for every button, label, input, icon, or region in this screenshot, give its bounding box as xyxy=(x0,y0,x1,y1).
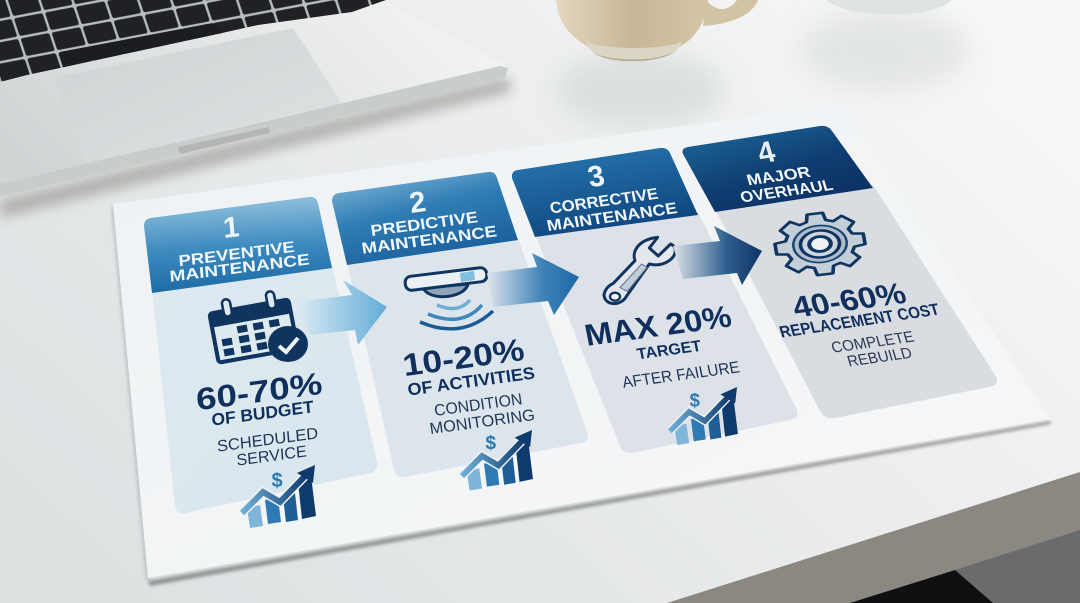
panel 3 stat label: TARGET xyxy=(635,338,703,363)
panel 4 title: OVERHAUL xyxy=(738,177,835,206)
panel 3 body xyxy=(535,212,798,453)
panel 4 stat label: REPLACEMENT COST xyxy=(777,301,942,342)
icon: growth chart xyxy=(670,387,738,445)
panel 2 title: PREDICTIVE xyxy=(370,209,479,240)
icon: wrench xyxy=(604,237,675,304)
icon: growth chart xyxy=(242,465,316,528)
paper shadow xyxy=(111,206,1051,586)
panel 3 step number: 3 xyxy=(585,159,607,194)
panel 2 description: MONITORING xyxy=(428,406,536,438)
panel 3 stat: MAX 20% xyxy=(582,300,734,353)
infographic sheet xyxy=(113,104,1050,578)
panel 1 body xyxy=(152,265,377,513)
desk front edge and floor xyxy=(667,472,1080,603)
panel 1 stat: 60-70% xyxy=(195,366,324,417)
panel 1 title: MAINTENANCE xyxy=(169,251,310,286)
icon: sensor with signal waves xyxy=(404,267,493,329)
panel 1 title: PREVENTIVE xyxy=(178,239,295,270)
panel 4 description: REBUILD xyxy=(845,345,914,370)
panel 4: major overhaul xyxy=(683,126,997,418)
panel 3: corrective maintenance xyxy=(512,148,798,453)
panel 2 description: CONDITION xyxy=(433,390,524,420)
panel 2 stat label: OF ACTIVITIES xyxy=(406,363,536,400)
panel 2 body xyxy=(347,238,588,477)
panel 2: predictive maintenance xyxy=(332,172,588,490)
arrow: step 3 to 4 xyxy=(673,226,762,285)
panel 1 description: SCHEDULED xyxy=(216,424,319,456)
icon: calendar with check xyxy=(205,288,308,365)
panel 4 step number: 4 xyxy=(753,135,780,170)
panel 4 title xyxy=(738,164,835,206)
panel 1 title xyxy=(169,239,310,286)
panel 1 description: SERVICE xyxy=(236,442,308,470)
panel 1 description xyxy=(216,424,319,470)
panel 2 step number: 2 xyxy=(407,185,428,220)
icon: growth chart: $ xyxy=(690,389,700,410)
panel 2 header xyxy=(332,172,518,265)
panel 1 stat label: OF BUDGET xyxy=(211,397,315,430)
panel 4 body xyxy=(715,185,997,418)
panel 1 header xyxy=(144,197,332,293)
icon: gear xyxy=(771,208,869,280)
icon: growth chart: $ xyxy=(271,470,283,492)
arrow: step 2 to 3 xyxy=(487,253,579,315)
panel 2 stat: 10-20% xyxy=(400,332,527,383)
arrow: step 1 to 2 xyxy=(297,280,387,345)
panel 3 title: CORRECTIVE xyxy=(548,186,660,218)
panel 4 description xyxy=(829,329,916,370)
icon: growth chart: $ xyxy=(485,433,496,454)
panel 1: preventive maintenance xyxy=(144,197,377,528)
panel 2 title: MAINTENANCE xyxy=(361,223,498,258)
panel 4 stat: 40-60% xyxy=(788,277,910,324)
panel 1 step number: 1 xyxy=(222,211,241,245)
panel 3 title xyxy=(545,186,679,235)
panel 2 title xyxy=(361,209,498,258)
laptop xyxy=(0,0,512,218)
panel 3 description: AFTER FAILURE xyxy=(621,358,741,392)
white cup xyxy=(800,0,970,90)
coffee mug xyxy=(555,0,758,128)
panel 4 header xyxy=(683,126,873,212)
icon: growth chart xyxy=(462,430,533,490)
panel 2 description xyxy=(428,390,536,438)
panel 4 description: COMPLETE xyxy=(829,329,916,357)
panel 3 header xyxy=(512,148,698,237)
panel 3 title: MAINTENANCE xyxy=(545,200,679,235)
panel 4 title: MAJOR xyxy=(745,164,813,189)
